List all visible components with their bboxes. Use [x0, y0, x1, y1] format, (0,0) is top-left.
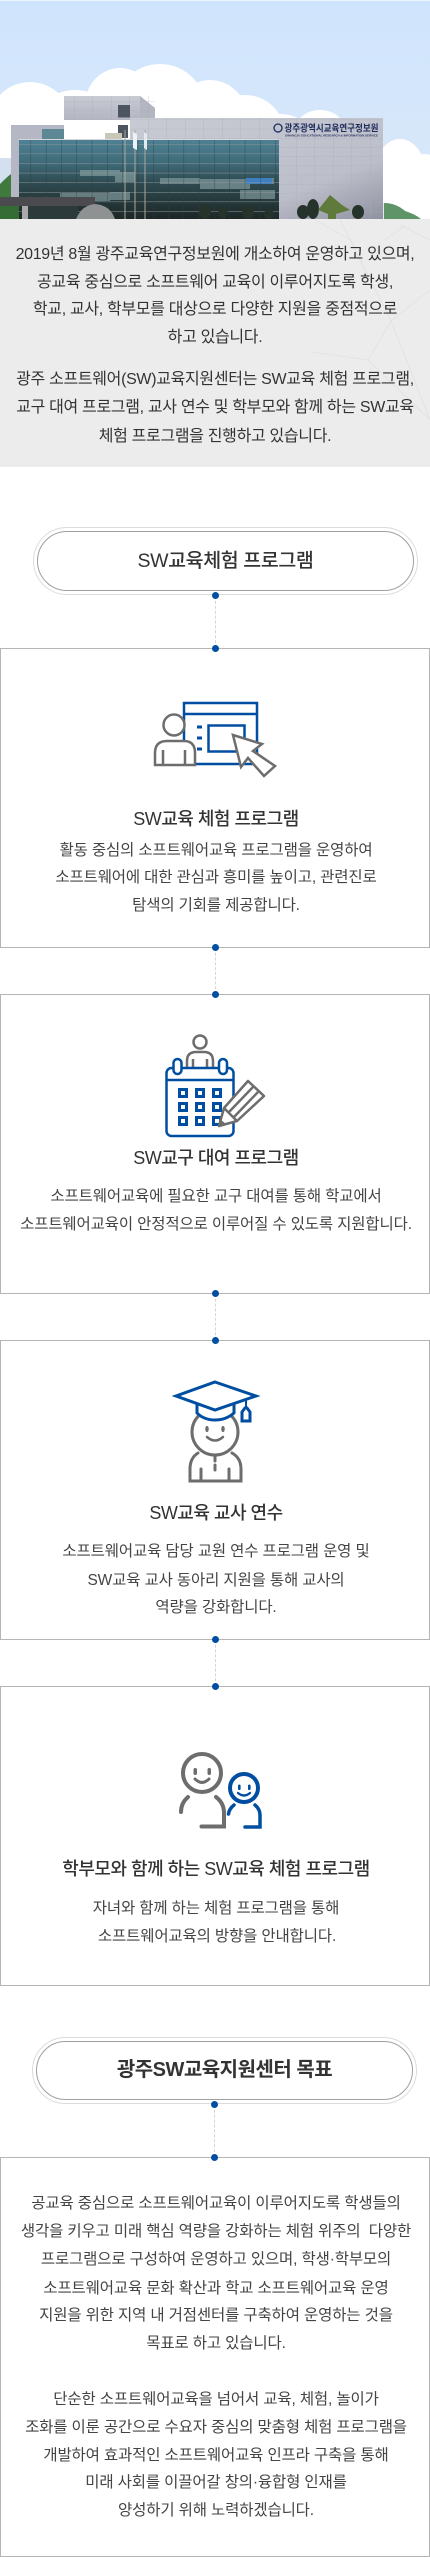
panel: SW teaching tool rental program — [0, 994, 430, 1294]
hero image: education research institute building: GWANGJU EDUCATIONAL RESEARCH & INFORMATION SERVICE — [285, 134, 378, 138]
description: 소프트웨어에 대한 관심과 흥미를 높이고, 관련진로 — [55, 869, 377, 886]
text: intro paragraph one: 학교, 교사, 학부모를 대상으로 다양한 지원을 중점적으로 — [33, 301, 397, 318]
heading: SW education programs: SW교육체험 프로그램 — [138, 550, 313, 572]
glass — [19, 139, 279, 219]
icon: presenter with screen and cursor — [154, 702, 277, 778]
text: intro paragraph two: 교구 대여 프로그램, 교사 연수 및 학부모와 함께 하는 SW교육 — [16, 399, 414, 416]
text: goals paragraph one: 소프트웨어교육 문화 확산과 학교 소프트웨어교육 운영 — [43, 2280, 389, 2297]
text: intro paragraph one: 공교육 중심으로 소프트웨어 교육이 이루어지도록 학생, — [37, 274, 393, 291]
description: 활동 중심의 소프트웨어교육 프로그램을 운영하여 — [60, 842, 372, 859]
text: intro paragraph one — [16, 246, 414, 346]
description: 소프트웨어교육 담당 교원 연수 프로그램 운영 및 — [62, 1543, 370, 1560]
text: intro paragraph two — [16, 370, 414, 445]
text: intro paragraph one: 2019년 8월 광주교육연구정보원에 개소하여 운영하고 있으며, — [16, 246, 414, 263]
main wall — [130, 118, 383, 219]
title: SW교구 대여 프로그램 — [133, 1148, 299, 1168]
text: intro paragraph one: 하고 있습니다. — [168, 329, 262, 346]
text: goals paragraph two: 조화를 이룬 공간으로 수요자 중심의 맞춤형 체험 프로그램을 — [25, 2419, 407, 2436]
description: 소프트웨어교육이 안정적으로 이루어질 수 있도록 지원합니다. — [20, 1216, 412, 1233]
text: goals paragraph one: 프로그램으로 구성하여 운영하고 있으며, 학생·학부모의 — [41, 2251, 391, 2268]
text: goals paragraph one: 공교육 중심으로 소프트웨어교육이 이루어지도록 학생들의 — [31, 2195, 401, 2212]
title: SW교육 교사 연수 — [149, 1503, 283, 1523]
panel: SW education teacher training — [0, 1340, 430, 1640]
heading: center goals: 광주SW교육지원센터 목표 — [117, 2059, 332, 2081]
canopy and stone sign — [0, 197, 95, 206]
text: goals paragraph two: 개발하여 효과적인 소프트웨어교육 인프라 구축을 통해 — [43, 2447, 389, 2464]
description — [20, 1188, 412, 1233]
shrubs — [199, 199, 364, 220]
text: goals paragraph one: 지원을 위한 지역 내 거점센터를 구축하여 운영하는 것을 — [39, 2307, 393, 2324]
icon: parent and child — [179, 1752, 262, 1829]
hero image: education research institute building: 광주광역시교육연구정보원 — [284, 122, 378, 134]
text: goals paragraph two: 단순한 소프트웨어교육을 넘어서 교육, 체험, 놀이가 — [53, 2391, 379, 2408]
description — [62, 1543, 370, 1616]
title: SW교육 체험 프로그램 — [133, 809, 299, 829]
text: goals paragraph one: 목표로 하고 있습니다. — [146, 2335, 286, 2352]
left block — [11, 125, 64, 198]
description: 역량을 강화합니다. — [155, 1599, 277, 1616]
icon: graduate with cap — [172, 1380, 260, 1482]
heading: SW education programs — [33, 527, 418, 595]
clouds — [0, 64, 430, 226]
flag poles — [125, 130, 145, 219]
text: intro paragraph two: 체험 프로그램을 진행하고 있습니다. — [99, 428, 331, 445]
panel: SW education experience program — [0, 648, 430, 948]
text: goals paragraph two: 미래 사회를 이끌어갈 창의·융합형 인재를 — [85, 2474, 347, 2491]
description: 소프트웨어교육에 필요한 교구 대여를 통해 학교에서 — [50, 1188, 382, 1205]
title: 학부모와 함께 하는 SW교육 체험 프로그램 — [62, 1859, 370, 1879]
panel: program with parents — [0, 1686, 430, 1986]
description — [93, 1900, 339, 1945]
description: 소프트웨어교육의 방향을 안내합니다. — [98, 1928, 336, 1945]
trees behind — [0, 174, 11, 219]
text: goals paragraph one: 생각을 키우고 미래 핵심 역량을 강화하는 체험 위주의 다양한 — [21, 2223, 411, 2240]
icon: calendar with person and pencil — [165, 1034, 266, 1138]
heading: center goals — [32, 2037, 417, 2104]
text: goals paragraph two — [25, 2391, 407, 2519]
tower — [64, 96, 155, 120]
sign lettering — [274, 124, 282, 132]
description: 탐색의 기회를 제공합니다. — [132, 897, 300, 914]
panel: center goals — [0, 2157, 430, 2557]
hero image: education research institute building — [0, 0, 430, 219]
panel: introduction — [0, 219, 430, 467]
text: goals paragraph two: 양성하기 위해 노력하겠습니다. — [118, 2502, 314, 2519]
text: intro paragraph two: 광주 소프트웨어(SW)교육지원센터는 SW교육 체험 프로그램, — [16, 371, 414, 388]
description: SW교육 교사 동아리 지원을 통해 교사의 — [87, 1572, 345, 1589]
description: 자녀와 함께 하는 체험 프로그램을 통해 — [93, 1900, 339, 1917]
description — [55, 842, 377, 914]
text: goals paragraph one — [21, 2195, 411, 2352]
